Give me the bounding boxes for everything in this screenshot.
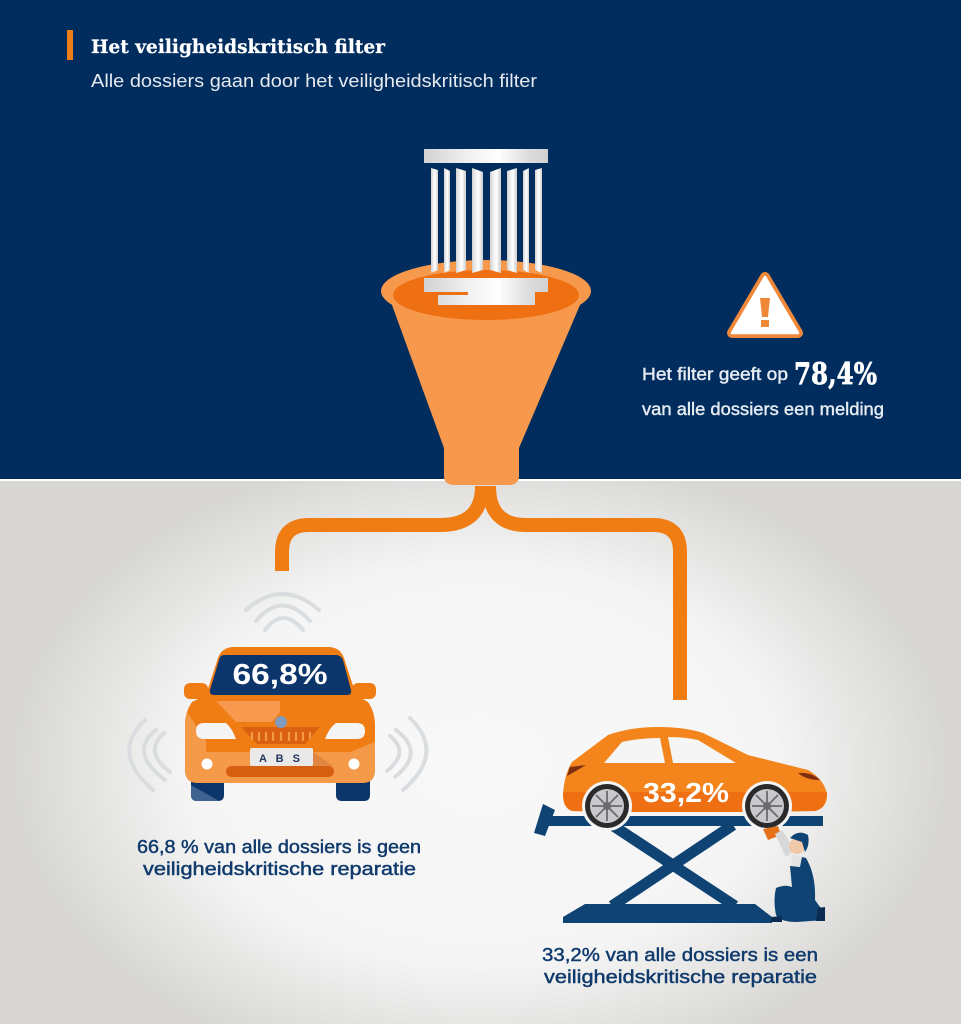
lift base — [563, 904, 772, 923]
text: non safety critical — [137, 836, 421, 879]
funnel cone — [392, 305, 580, 485]
text: non safety critical: veiligheidskritische reparatie — [143, 858, 416, 879]
bumper — [226, 766, 334, 777]
fog lights — [202, 758, 212, 770]
windscreen value: 66,8% — [232, 659, 328, 691]
mirrors — [184, 683, 208, 699]
illustration: front view car — [184, 647, 376, 801]
illustration: car on lift with mechanic — [534, 727, 827, 923]
plate shadow — [313, 752, 333, 766]
callout: filter result — [642, 357, 884, 419]
filter base plate — [424, 278, 548, 305]
logo — [275, 716, 287, 728]
illustration: front view car: A B S — [259, 753, 303, 765]
licence plate — [250, 748, 313, 766]
grille — [241, 727, 320, 744]
body lower lighter panels — [185, 712, 375, 783]
subtitle: Alle dossiers gaan door het veiligheidskritisch filter — [91, 71, 537, 91]
panel: navy top section — [0, 0, 961, 479]
rear and front lights — [567, 765, 586, 776]
filter slats — [431, 168, 542, 273]
callout: filter result: van alle dossiers een melding — [642, 399, 884, 419]
car lower band — [563, 792, 827, 812]
filter top bar — [424, 149, 548, 163]
text: non safety critical: 66,8 % van alle dossiers is geen — [137, 836, 421, 857]
headlights — [196, 723, 236, 739]
panel: light bottom section — [0, 479, 961, 1024]
text: safety critical: veiligheidskritische reparatie — [544, 966, 817, 987]
text: safety critical — [542, 944, 818, 987]
lift end stop — [534, 804, 555, 836]
icon: signal waves around front car — [129, 594, 426, 790]
funnel opening — [393, 270, 579, 320]
callout: filter result: Het filter geeft op — [642, 364, 788, 384]
funnel rim — [381, 260, 591, 322]
windscreen — [210, 655, 351, 695]
icon: warning triangle — [732, 277, 798, 333]
tires — [191, 775, 224, 801]
icon: funnel with filter — [381, 149, 591, 485]
car windows — [604, 738, 665, 763]
heading accent bar — [67, 30, 73, 60]
text: safety critical: 33,2% van alle dossiers is een — [542, 944, 818, 965]
car body — [563, 727, 827, 812]
wheels — [582, 781, 792, 831]
connecting pipes from funnel to outcomes — [282, 486, 680, 700]
cabin and body — [185, 647, 375, 783]
lift platform — [545, 816, 823, 826]
callout: filter result: 78,4% — [794, 357, 877, 392]
title: Het veiligheidskritisch filter — [91, 36, 386, 58]
lift scissors — [612, 825, 735, 906]
car value: 33,2% — [643, 777, 729, 808]
hood highlight — [216, 701, 280, 722]
mechanic — [763, 826, 825, 922]
